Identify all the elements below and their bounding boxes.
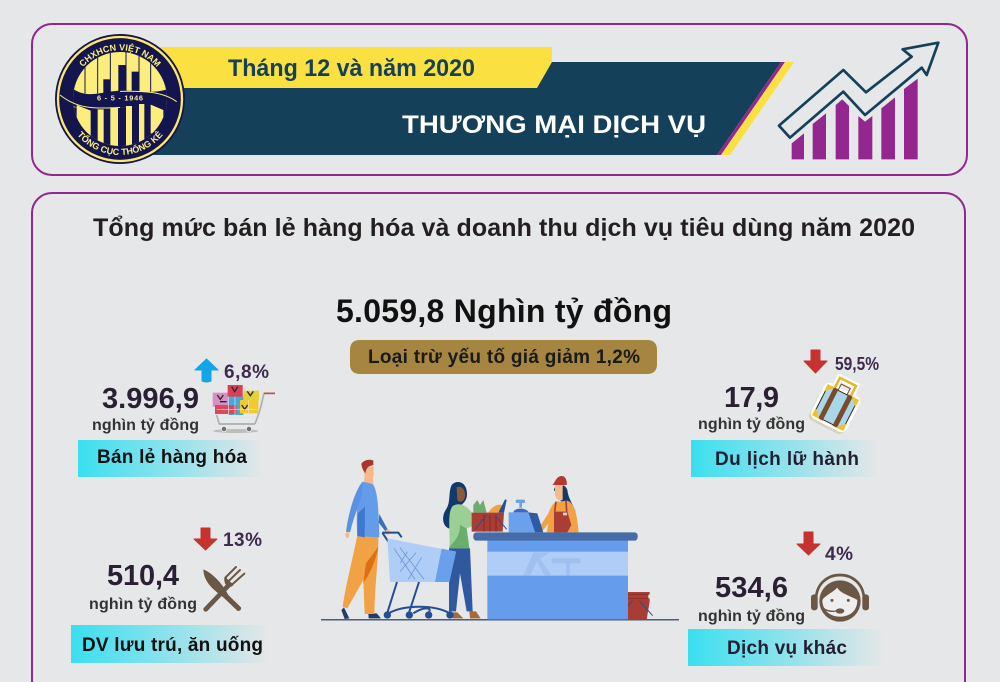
total value: 5.059,8 Nghìn tỷ đồng	[336, 293, 672, 329]
figure: stacked baskets	[628, 592, 653, 619]
icon: up arrow	[195, 359, 218, 382]
icon: rising bar chart with arrow	[779, 43, 938, 159]
unit: retail goods: nghìn tỷ đồng	[92, 417, 199, 434]
unit: accommodation and food: nghìn tỷ đồng	[89, 596, 197, 613]
label: accommodation and food: DV lưu trú, ăn uống	[82, 635, 263, 656]
figure: cashier	[509, 476, 579, 532]
label: travel: Du lịch lữ hành	[715, 449, 859, 470]
icon: statistics office logo: TỔNG CỤC THỐNG KÊ	[78, 130, 163, 156]
ribbon: yellow date band	[150, 47, 552, 88]
icon: suitcase	[811, 374, 863, 432]
callout: price adjustment: Loại trừ yếu tố giá giảm 1,2%	[368, 347, 640, 368]
change: other services: 4%	[825, 544, 853, 565]
illustration: supermarket checkout	[321, 460, 679, 620]
icon: down arrow	[797, 532, 820, 555]
icon: knife and fork	[203, 567, 244, 611]
icon: headset operator	[811, 575, 869, 622]
figure: woman customer	[443, 482, 484, 618]
change: retail goods: 6,8%	[224, 362, 269, 383]
value: travel: 17,9	[724, 382, 779, 414]
item: accommodation and food	[71, 528, 270, 663]
value: other services: 534,6	[715, 572, 788, 604]
icon: down arrow	[194, 528, 217, 550]
icon: statistics office logo: CHXHCN VIỆT NAM	[80, 44, 161, 67]
heading: section title: THƯƠNG MẠI DỊCH VỤ	[402, 111, 706, 139]
item: travel	[691, 350, 880, 477]
unit: travel: nghìn tỷ đồng	[698, 416, 805, 433]
ribbon: yellow stripe	[721, 62, 794, 155]
icon: statistics office logo	[55, 34, 185, 164]
ribbon: navy title band	[150, 62, 781, 155]
item: retail goods	[78, 359, 275, 477]
heading: panel title: Tổng mức bán lẻ hàng hóa và doanh thu dịch vụ tiêu dùng năm 2020	[93, 214, 915, 242]
figure: man with cart	[341, 460, 390, 619]
callout: price adjustment	[350, 340, 657, 374]
figure: checkout counter	[473, 532, 638, 619]
label: other services: Dịch vụ khác	[727, 638, 847, 659]
change: travel: 59,5%	[835, 354, 879, 374]
change: accommodation and food: 13%	[223, 530, 262, 551]
icon: statistics office logo: 6 - 5 - 1946	[97, 94, 143, 103]
item: other services	[688, 532, 885, 666]
icon: shopping cart	[213, 385, 275, 433]
unit: other services: nghìn tỷ đồng	[698, 608, 805, 625]
panel: header	[31, 23, 968, 176]
ribbon: purple stripe	[717, 62, 785, 155]
heading: date: Tháng 12 và năm 2020	[228, 55, 475, 82]
label: retail goods: Bán lẻ hàng hóa	[97, 447, 247, 468]
icon: down arrow	[804, 350, 827, 373]
figure: shopping cart	[382, 533, 456, 619]
value: accommodation and food: 510,4	[107, 560, 179, 592]
panel: retail and consumer services	[32, 193, 965, 682]
value: retail goods: 3.996,9	[102, 383, 199, 415]
figure: basket on counter	[472, 499, 507, 532]
